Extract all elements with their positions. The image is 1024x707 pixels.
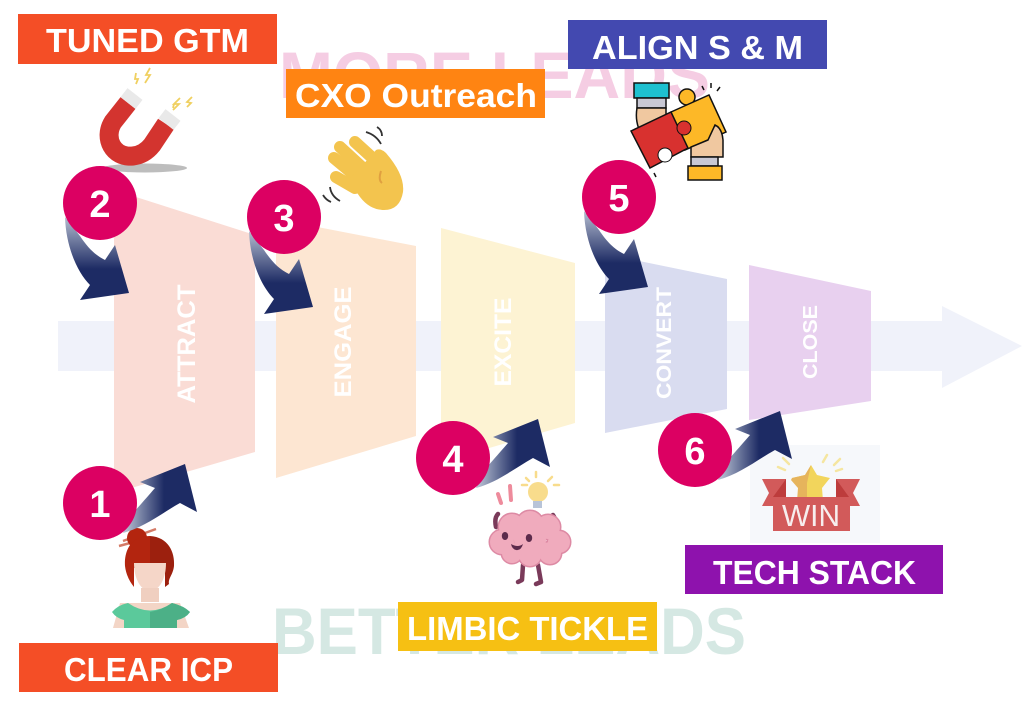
stage: close [749,265,871,420]
background word: MORE LEADS: MORE LEADS [279,38,710,112]
stage: attract: ATTRACT [173,285,201,403]
step 4: number and arrow: 4 [442,439,464,481]
label: tech stack [685,545,943,594]
step 2: number and arrow [63,166,137,300]
label: align s and m [568,20,827,69]
step 3: number and arrow [247,180,321,314]
stage: engage [276,219,416,478]
label: tuned gtm: TUNED GTM [46,22,249,59]
stage: excite: EXCITE [490,298,517,386]
icon: puzzle hands [631,83,726,180]
step 1: number and arrow [63,464,197,540]
stage: convert [605,254,727,433]
step 1: number and arrow: 1 [89,484,111,526]
label: clear icp [19,643,278,692]
icon: win badge [750,445,880,543]
label: tech stack: TECH STACK [713,554,916,591]
stage: excite [441,228,575,462]
icon: magnet [103,68,192,172]
step 6: number and arrow: 6 [684,431,706,473]
stage: convert: CONVERT [653,287,676,399]
step 4: number and arrow [416,419,550,495]
step 5: number and arrow: 5 [608,178,630,220]
step 6: number and arrow [658,411,792,487]
label: tuned gtm [18,14,277,64]
step 3: number and arrow: 3 [273,198,295,240]
icon: waving hand [323,127,403,210]
icon: woman [112,528,190,628]
label: align s and m: ALIGN S & M [592,29,803,66]
stage: attract [114,190,255,493]
label: clear icp: CLEAR ICP [64,651,233,688]
timeline arrow [58,306,1022,388]
label: cxo outreach [286,69,545,118]
icon: brain [490,472,570,584]
background word: BETTER LEADS: BETTER LEADS [272,594,746,668]
step 2: number and arrow: 2 [89,184,111,226]
label: cxo outreach: CXO Outreach [295,77,537,114]
stage: engage: ENGAGE [330,286,357,398]
label: limbic tickle: LIMBIC TICKLE [407,610,648,647]
icon: win badge: WIN [782,498,840,533]
step 5: number and arrow [582,160,656,294]
stage: close: CLOSE [800,305,822,379]
